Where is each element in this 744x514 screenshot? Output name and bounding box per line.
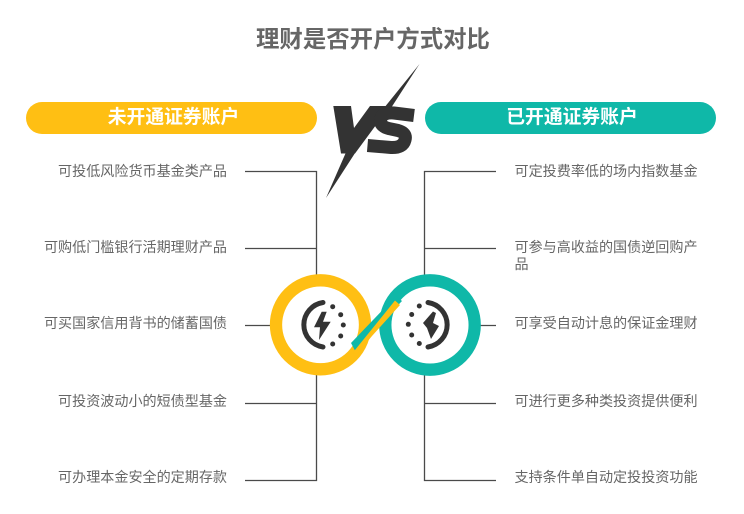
icon: right bolt gauge xyxy=(406,302,447,347)
slash upper part xyxy=(384,64,420,108)
title: 理财是否开户方式对比 xyxy=(256,26,490,52)
left item 1: 可投低风险货币基金类产品 xyxy=(58,163,227,179)
left item 5: 可办理本金安全的定期存款 xyxy=(58,469,227,485)
letter S xyxy=(368,113,414,148)
left item 2: 可购低门槛银行活期理财产品 xyxy=(44,239,227,255)
right item 2 xyxy=(514,239,698,272)
VS emblem xyxy=(326,64,420,198)
right header: brokerage account opened xyxy=(425,102,716,134)
right item 4: 可进行更多种类投资提供便利 xyxy=(514,393,698,409)
infinity symbol xyxy=(276,280,475,370)
right item 3: 可享受自动计息的保证金理财 xyxy=(514,315,698,331)
left item 3: 可买国家信用背书的储蓄国债 xyxy=(44,315,227,331)
teal band xyxy=(351,296,402,350)
icon: left bolt gauge xyxy=(304,302,346,347)
right item 5: 支持条件单自动定投投资功能 xyxy=(514,469,698,485)
right item 2: 可参与高收益的国债逆回购产 xyxy=(514,239,698,255)
yellow band xyxy=(352,300,400,354)
right item 2: 品 xyxy=(514,256,529,272)
right item 1: 可定投费率低的场内指数基金 xyxy=(514,163,698,179)
left header: no brokerage account xyxy=(26,102,317,134)
right header: brokerage account opened: 已开通证券账户 xyxy=(506,106,638,127)
left item 4: 可投资波动小的短债型基金 xyxy=(58,393,227,409)
teal ring xyxy=(385,280,475,370)
slash lower tail xyxy=(326,150,357,198)
left header: no brokerage account: 未开通证券账户 xyxy=(108,106,239,127)
letter V xyxy=(333,106,390,154)
yellow ring xyxy=(276,280,365,369)
